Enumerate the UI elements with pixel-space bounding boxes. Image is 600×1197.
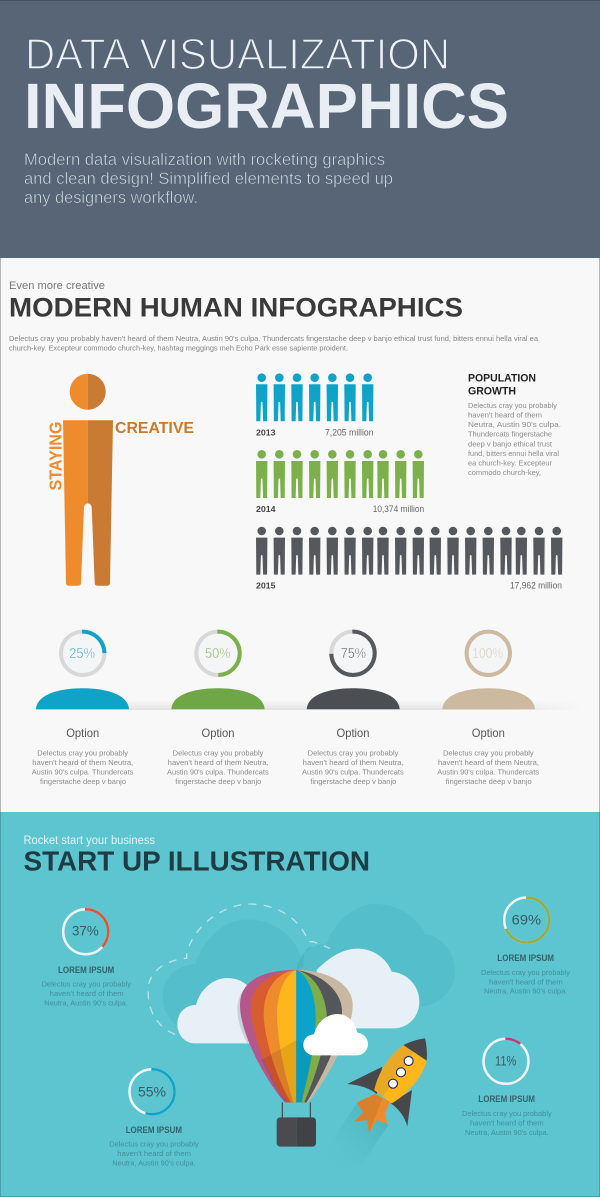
text: population growth description: deep v banjo ethical trust	[468, 440, 553, 448]
option card: 25%: 25%	[69, 645, 95, 662]
option card: 50%: Austin 90's culpa. Thundercats	[167, 768, 269, 776]
header description: and clean design! Simplified elements to speed up	[24, 170, 393, 188]
option card: 50%: 50%	[205, 645, 231, 662]
stat: 37%: 37%	[72, 923, 99, 939]
label: 2015 values: 17,962 million	[510, 580, 562, 590]
cloud: foreground	[303, 1014, 368, 1055]
pictogram row: 2015	[256, 527, 562, 575]
text: population growth description: Delectus cray you probably	[468, 401, 557, 410]
cloud: right	[317, 949, 419, 1028]
stat: 37%: Neutra, Austin 90's culpa.	[44, 999, 128, 1008]
stat: 69%: Neutra, Austin 90's culpa.	[484, 987, 567, 996]
title: data visualization: DATA VISUALIZATION	[25, 31, 450, 79]
stat: 37%	[42, 909, 131, 1008]
stat: 11%: haven't heard of them	[470, 1118, 544, 1127]
stat: 11%: 11%	[495, 1053, 516, 1069]
label: creative: CREATIVE	[115, 420, 194, 437]
option card: 50%: haven't heard of them Neutra,	[168, 758, 269, 767]
rocket	[347, 1038, 427, 1133]
rocket long shadow	[323, 1103, 388, 1170]
option card: 50%: fingerstache deep v banjo	[175, 777, 261, 786]
label: 2015 values	[256, 580, 562, 590]
option card: 25%: Austin 90's culpa. Thundercats	[32, 768, 134, 776]
stat: 37%: LOREM IPSUM	[58, 965, 114, 975]
option card: 100%: fingerstache deep v banjo	[446, 777, 532, 786]
section heading: START UP ILLUSTRATION	[24, 846, 370, 877]
stat: 55%	[109, 1069, 199, 1168]
background clouds	[163, 904, 455, 1033]
option card: 50%	[167, 632, 269, 786]
stat: 11%	[462, 1039, 552, 1137]
option card: 25%: haven't heard of them Neutra,	[32, 758, 133, 767]
illustration: balloon, clouds and rocket	[148, 904, 455, 1170]
human figure	[46, 374, 194, 586]
option card: 75%: haven't heard of them Neutra,	[303, 758, 404, 767]
option card: 75%: Option	[336, 726, 370, 740]
text: population growth description: ea church-key. Excepteur	[468, 458, 552, 468]
label: 2013 values: 7,205 million	[325, 428, 374, 438]
heading: population growth: GROWTH	[468, 386, 516, 398]
text: population growth description	[468, 401, 561, 477]
text: population growth description: fund, bitters ennui hella viral	[468, 449, 559, 458]
option card: 25%: Option	[66, 726, 99, 740]
option card: 75%: 75%	[341, 645, 366, 662]
option card: 75%: fingerstache deep v banjo	[310, 777, 396, 786]
header description	[24, 151, 393, 207]
label: 2013 values	[256, 428, 374, 438]
stat: 55%: Neutra, Austin 90's culpa.	[112, 1159, 196, 1168]
stat: 11%: Delectus cray you probably	[462, 1109, 552, 1118]
stat: 55%: LOREM IPSUM	[126, 1125, 182, 1135]
stat: 69%: 69%	[512, 911, 541, 927]
option card: 50%: Option	[202, 726, 234, 740]
option card: 75%: Austin 90's culpa. Thundercats	[302, 768, 404, 776]
stat: 11%: Neutra, Austin 90's culpa.	[465, 1128, 549, 1137]
heading: population growth	[468, 372, 536, 398]
cloud: left	[177, 978, 257, 1043]
label: 2013 values: 2013	[256, 428, 276, 438]
text: population growth description: Neutra, Austin 90's culpa.	[468, 420, 561, 429]
section kicker: Rocket start your business	[24, 835, 155, 847]
dashed flight path	[148, 904, 330, 1034]
pictogram row: 2013	[256, 373, 373, 421]
label: 2014 values: 2014	[256, 505, 276, 514]
label: staying: STAYING	[46, 422, 66, 490]
option card: 50%: Delectus cray you probably	[173, 748, 264, 758]
option card: 75%	[302, 632, 404, 786]
panel: start up illustration	[0, 812, 600, 1197]
header description: Modern data visualization with rocketing graphics	[24, 151, 385, 169]
stat: 55%: haven't heard of them	[117, 1149, 191, 1158]
label: 2015 values: 2015	[256, 582, 276, 590]
header description: any designers workflow.	[24, 189, 198, 207]
pictogram row: 2014	[256, 450, 424, 498]
option card: 100%: Austin 90's culpa. Thundercats	[437, 768, 539, 776]
stat: 37%: haven't heard of them	[50, 989, 124, 998]
text: population growth description: haven't heard of them	[468, 410, 542, 420]
panel: header	[0, 0, 600, 258]
text: population growth description: Thundercats fingerstache	[468, 430, 552, 438]
option card: 100%: 100%	[472, 645, 503, 662]
stat: 11%: LOREM IPSUM	[478, 1094, 535, 1104]
option card: 25%: fingerstache deep v banjo	[40, 777, 126, 786]
stat: 69%	[481, 898, 570, 996]
section kicker: Even more creative	[9, 280, 105, 292]
label: 2014 values	[256, 504, 424, 514]
option card: 100%	[437, 632, 539, 786]
balloon shadow on cloud	[237, 990, 255, 1043]
panel: modern human infographics	[0, 258, 600, 812]
section description: Delectus cray you probably haven't heard of them Neutra, Austin 90's culpa. Thundercats fingerstache deep v banjo ethical trust fund, bitters ennui hella viral ea	[9, 334, 539, 343]
balloon ropes	[282, 1102, 310, 1118]
label: 2014 values: 10,374 million	[373, 504, 424, 514]
dome shadow band	[36, 704, 551, 710]
stat: 55%: 55%	[138, 1083, 166, 1099]
stat: 69%: Delectus cray you probably	[481, 968, 570, 977]
stat: 69%: haven't heard of them	[489, 977, 563, 986]
section description: church-key. Excepteur commodo church-key, hashtag meggings meh Echo Park esse sapiente proident.	[9, 344, 348, 352]
heading: population growth: POPULATION	[468, 372, 536, 384]
option card: 100%: Delectus cray you probably	[443, 748, 534, 758]
balloon basket	[277, 1117, 316, 1147]
text: population growth description: commodo church-key,	[468, 468, 541, 477]
stat: 55%: Delectus cray you probably	[109, 1140, 199, 1149]
option card: 75%: Delectus cray you probably	[308, 748, 399, 758]
option card: 25%: Delectus cray you probably	[37, 748, 128, 758]
section heading: MODERN HUMAN INFOGRAPHICS	[9, 292, 463, 322]
option card: 100%: Option	[472, 726, 505, 740]
hot air balloon	[240, 970, 353, 1147]
option card: 100%: haven't heard of them Neutra,	[438, 758, 539, 767]
section description	[9, 334, 539, 352]
title: infographics: INFOGRAPHICS	[24, 70, 509, 142]
stat: 69%: LOREM IPSUM	[497, 953, 554, 963]
stat: 37%: Delectus cray you probably	[42, 979, 131, 988]
option card: 25%	[32, 632, 134, 786]
